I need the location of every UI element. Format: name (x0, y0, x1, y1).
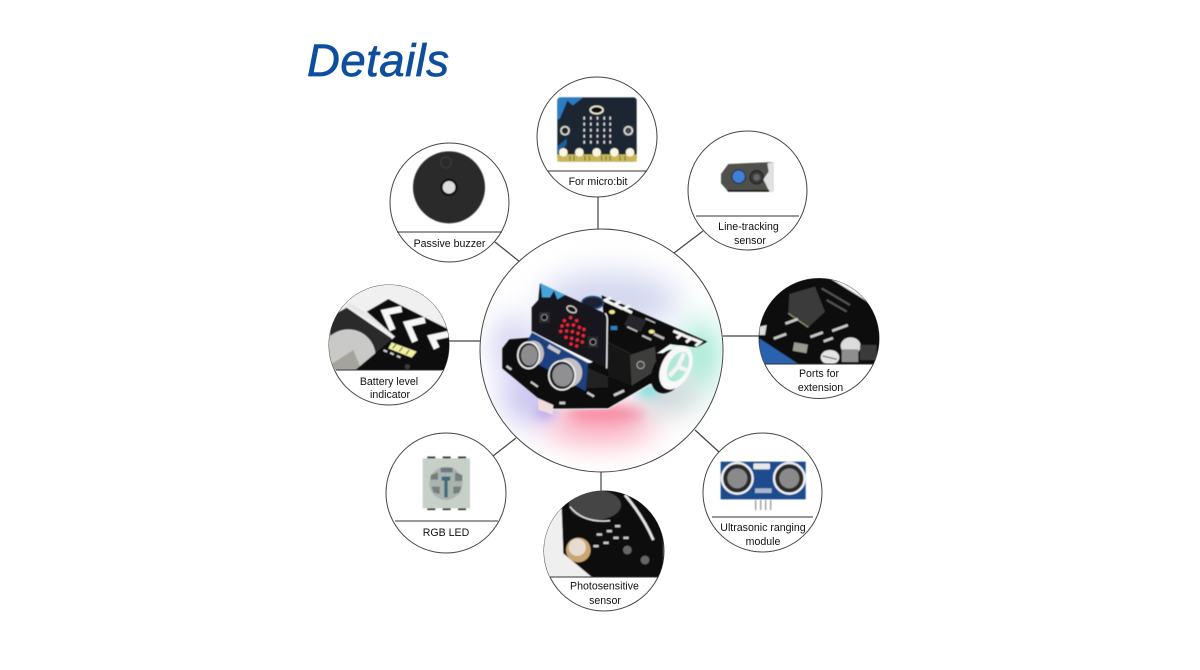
panel: Ports for extension (757, 277, 882, 398)
icon: line-tracking sensor (721, 162, 773, 192)
micro:bit board (532, 283, 607, 368)
panel: Ultrasonic ranging module (703, 433, 822, 552)
icon: RGB LED chip (423, 457, 470, 510)
connector lines (449, 197, 759, 491)
wheel (644, 343, 694, 399)
panel: Line-tracking sensor (688, 131, 807, 250)
label line 2: extension (798, 382, 843, 394)
panel: central robot (480, 229, 723, 472)
coloured LED glow (490, 272, 720, 443)
icon: micro:bit board (557, 97, 637, 162)
label: For micro:bit (569, 176, 627, 188)
label line 2: sensor (734, 235, 766, 247)
icon: photosensitive sensor close-up (540, 490, 663, 578)
caster (538, 398, 553, 415)
upper chevron board (602, 295, 707, 355)
panel: Passive buzzer (390, 143, 509, 262)
label: Battery level (360, 376, 418, 388)
panel: Photosensitive sensor (540, 490, 664, 611)
panel: For micro:bit (537, 77, 657, 197)
lower chassis (502, 337, 667, 409)
chassis markings (506, 365, 625, 404)
ultrasonic module (520, 332, 588, 391)
robot car (502, 283, 707, 415)
label: Passive buzzer (414, 238, 486, 250)
label: RGB LED (423, 527, 470, 539)
icon: ports close-up (757, 277, 882, 365)
label: Line-tracking (718, 221, 779, 233)
title: Details (307, 35, 449, 86)
panel: RGB LED (386, 433, 506, 553)
label line 2: sensor (589, 595, 621, 607)
label line 2: module (746, 536, 780, 548)
motor block (607, 342, 633, 387)
panel: Battery level indicator (328, 284, 450, 406)
rear hoop behind micro:bit (582, 297, 603, 309)
label: Ports for (799, 368, 839, 380)
icon: buzzer (413, 151, 485, 223)
icon: ultrasonic module (721, 462, 806, 510)
icon: battery indicator close-up (329, 284, 449, 370)
label: Photosensitive (570, 580, 639, 592)
label line 2: indicator (370, 389, 410, 401)
label: Ultrasonic ranging (720, 522, 806, 534)
